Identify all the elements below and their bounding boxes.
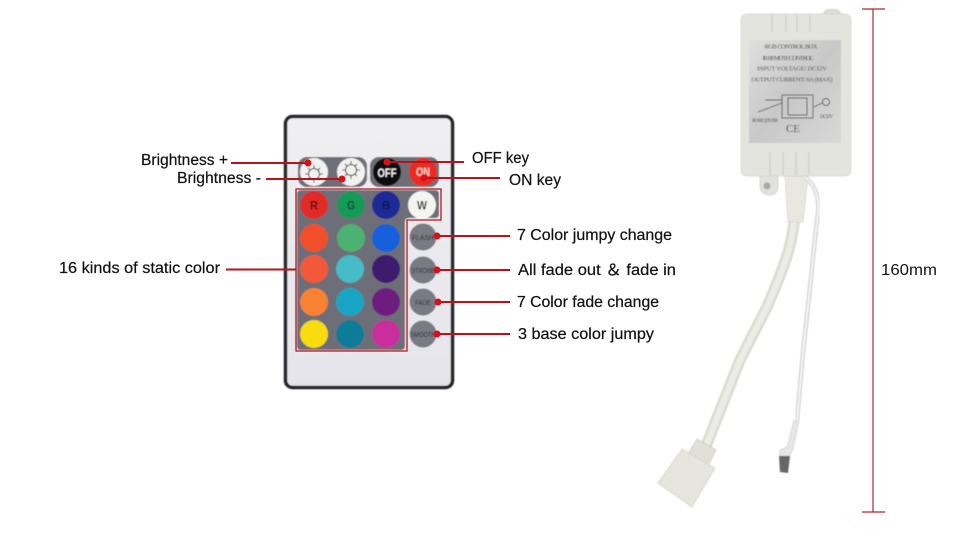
spec label: OUTPUT CURRENT: 6A (MAX) [752,76,832,84]
spec label: DC12V [820,115,833,120]
callout: on key [420,172,561,189]
callout: brightness plus: Brightness + [141,152,228,169]
thick cable [706,176,808,446]
mounting tab [760,172,778,195]
fade button [410,288,436,316]
callout: smooth: 3 base color jumpy [518,326,654,343]
spec label: CE [786,123,800,135]
callout: strobe [434,262,676,279]
callout: brightness minus [177,170,346,187]
callout: fade: 7 Color fade change [517,294,659,311]
strain relief [785,176,808,222]
thin cable [797,178,818,420]
dimension line: 160mm [862,9,937,512]
off button: OFF [378,166,396,180]
green button [337,191,365,219]
colour keys outline [296,189,441,351]
brightness plus button [300,158,328,186]
top knob [823,9,841,23]
callout: strobe: All fade out ＆ fade in [518,262,676,279]
callout: off key: OFF key [472,150,529,167]
spec label: RGB CONTROL BOX [764,44,818,50]
callout: fade [434,294,659,311]
brightness button panel [298,157,367,187]
red button [300,191,328,219]
four-pin connector [658,439,716,507]
callout: brightness plus [141,152,312,169]
callout: brightness minus: Brightness - [177,170,261,187]
power button panel [370,157,439,187]
white button [408,191,436,219]
red button: R [310,198,318,212]
brightness minus button [337,158,365,186]
control box [741,9,851,195]
off button [373,158,401,186]
on button [409,158,437,186]
white button: W [417,198,428,212]
colour keypad panel [297,190,439,350]
flash button [410,224,436,250]
spec label: IR RECEIVER [752,119,779,124]
remote control [286,116,452,388]
blue button [372,191,400,219]
spec label: IR REMOTE CONTROL [762,55,814,62]
strobe button [410,256,436,284]
dimension line: 160mm: 160mm [881,262,937,279]
green button: G [347,198,355,212]
moulded ridges [770,15,810,175]
remote body [286,116,452,388]
box body [741,14,851,176]
static colour buttons [300,224,400,348]
wiring diagram [758,95,830,118]
fade button: FADE [415,298,431,307]
callout: flash: 7 Color jumpy change [517,227,672,244]
flash button: FLASH [412,233,434,242]
smooth button [410,320,436,348]
smooth button: SMOOTH [410,330,436,339]
callout: smooth [434,326,654,343]
on button: ON [416,165,430,179]
callout: flash [434,227,672,244]
spec label [749,40,841,143]
strobe button: STROBE [412,266,434,275]
ir receiver head [779,420,799,473]
spec label: INPUT VOLTAGE: DC12V [757,66,827,72]
callout: off key [384,150,529,167]
callout: on key: ON key [509,172,561,189]
blue button: B [382,198,390,212]
callout: static colour: 16 kinds of static color [59,260,220,277]
